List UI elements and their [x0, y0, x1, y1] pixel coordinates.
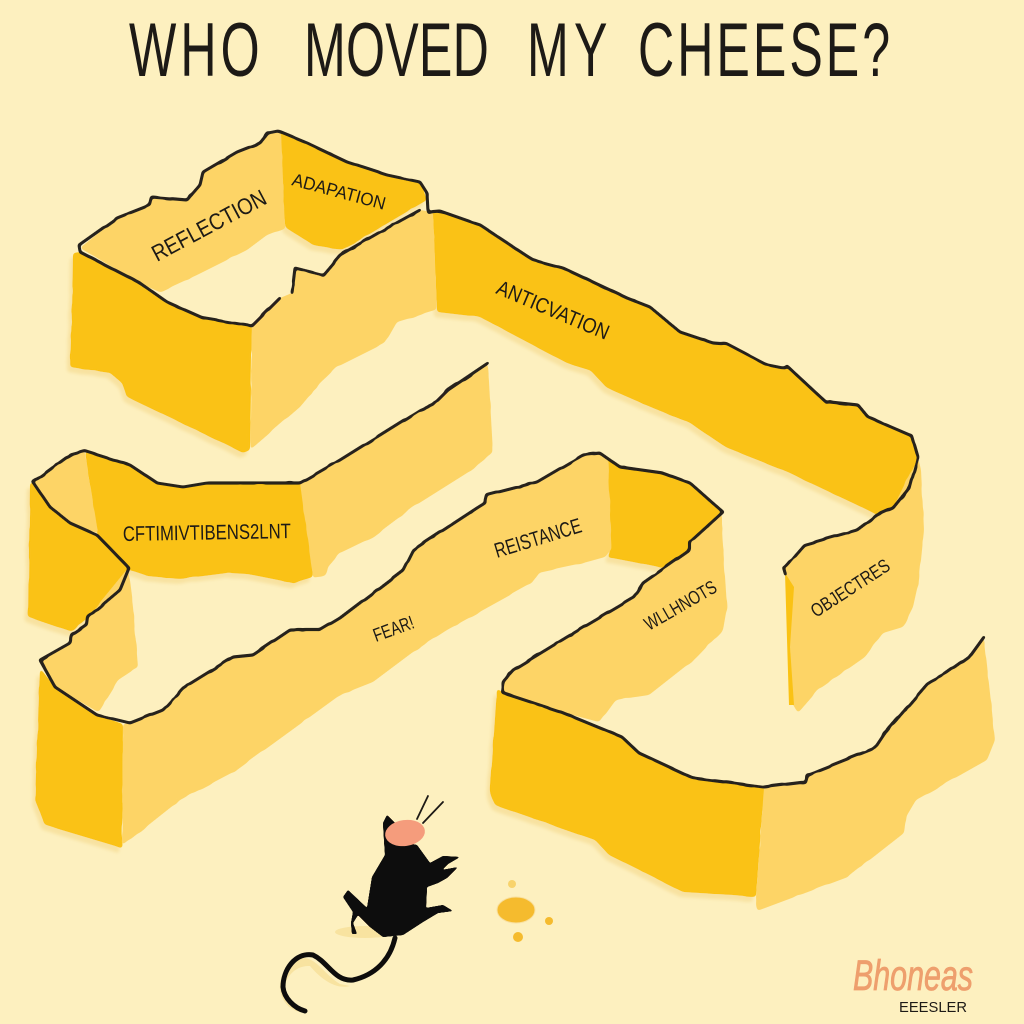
signature	[853, 952, 973, 1016]
panel: anticipation wall	[427, 211, 918, 515]
label: resistance: REISTANCE	[492, 514, 585, 563]
signature name: Bhoneas	[853, 952, 973, 1000]
label: adaptation: ADAPATION	[290, 170, 388, 214]
panel: connector fold	[40, 568, 138, 712]
panel: resistance and fear wall	[122, 453, 612, 846]
panel: commitment wall	[85, 451, 313, 583]
mouse head	[383, 817, 427, 849]
label: objectives: OBJECTRES	[807, 556, 894, 622]
panel: reflection wall	[80, 131, 285, 292]
panel: front left wall	[70, 252, 252, 453]
panel: commitment end wall	[300, 363, 493, 578]
label: fear: FEAR!	[371, 613, 417, 647]
icon: mouse	[280, 796, 460, 1012]
title: WHO	[129, 8, 260, 93]
label: anticipation: ANTICVATION	[493, 276, 612, 344]
label: willingness: WLLHNOTS	[641, 577, 721, 635]
title: MOVED	[304, 8, 489, 93]
title: CHEESE?	[638, 8, 890, 93]
panel: resistance corner	[600, 453, 723, 568]
panel: adaptation wall	[280, 131, 427, 250]
mouse tail	[283, 938, 395, 1011]
panel: far left corner	[33, 451, 98, 533]
mouse shadow	[280, 926, 395, 1012]
panel: lower front dark wall	[490, 688, 764, 897]
panel: objectives wall	[784, 457, 924, 713]
panel: lower left front wall	[35, 668, 123, 848]
panel: willingness wall	[503, 513, 727, 722]
mouse whiskers	[417, 796, 443, 823]
sliver: objectives edge	[785, 573, 794, 705]
icon: cheese crumbs	[497, 880, 553, 942]
signature subtext: EEESLER	[899, 999, 967, 1016]
small crumbs	[508, 880, 553, 942]
panel: far left block	[28, 482, 128, 632]
label: commitment: CFTIMIVTIBENS2LNT	[123, 520, 291, 546]
label: reflection: REFLECTION	[147, 184, 271, 266]
mouse body	[343, 815, 460, 937]
large crumb	[497, 897, 535, 923]
panel: lower right wall	[756, 637, 995, 911]
title	[129, 8, 890, 93]
maze outline	[33, 131, 984, 787]
title: MY	[527, 8, 608, 93]
panel: front right wall	[250, 210, 437, 450]
